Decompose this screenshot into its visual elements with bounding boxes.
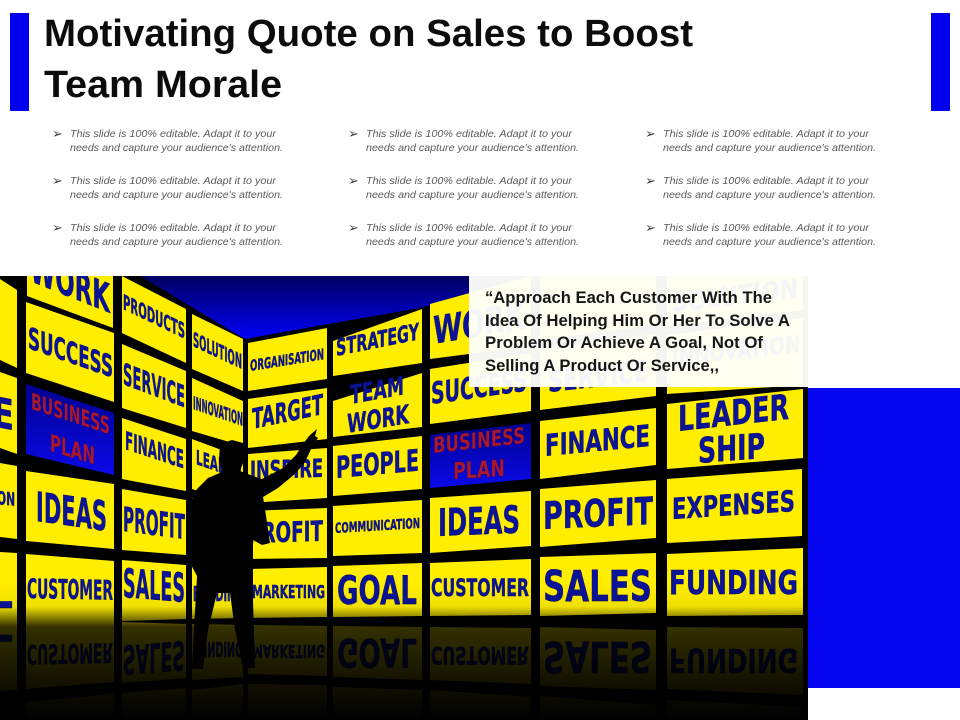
- quote box: Selling A Product Or Service,,: [485, 357, 719, 375]
- centre wall screens: WORK: [347, 400, 410, 440]
- bullet column 3: ➢: [645, 127, 656, 142]
- left wall screens: LEADER: [196, 446, 242, 485]
- bullet column 1: needs and capture your audience's attention.: [70, 189, 283, 201]
- photo: man pointing at wall of business word screens: [0, 243, 808, 720]
- bullet column 2: This slide is 100% editable. Adapt it to your: [366, 222, 573, 234]
- centre wall screens: TARGET: [252, 388, 323, 436]
- bullet column 2: This slide is 100% editable. Adapt it to your: [366, 128, 573, 140]
- right wall screens: SERVICE: [548, 354, 648, 400]
- floor reflection of screens: FUNDING: [193, 637, 243, 661]
- bullet column 3: needs and capture your audience's attention.: [663, 189, 876, 201]
- centre wall screens: COMMUNICATION: [335, 516, 420, 537]
- photo: man pointing at wall of business word screens: INNOVATION: [193, 393, 243, 431]
- bullet column 1: [52, 127, 283, 248]
- centre wall screens: MARKETING: [252, 582, 325, 603]
- floor reflection of screens: GOAL: [337, 629, 417, 674]
- floor reflection of screens: CUSTOMER: [27, 636, 113, 669]
- bullet column 1: ➢: [52, 221, 63, 236]
- photo: man pointing at wall of business word screens: SOLUTION: [193, 327, 242, 374]
- centre wall screens: WORK: [433, 293, 526, 354]
- man silhouette pointing: [188, 429, 318, 669]
- bullet column 1: This slide is 100% editable. Adapt it to your: [70, 175, 277, 187]
- bullet column 3: needs and capture your audience's attention.: [663, 142, 876, 154]
- right accent bar: [931, 13, 950, 111]
- centre wall screens: ORGANISATION: [250, 345, 324, 375]
- centre wall screens: PEOPLE: [336, 444, 419, 486]
- bullet column 1: ➢: [52, 127, 63, 142]
- left wall screens: PROFIT: [123, 500, 185, 548]
- bullet column 3: This slide is 100% editable. Adapt it to your: [663, 128, 870, 140]
- bullet column 3: needs and capture your audience's attention.: [663, 236, 876, 248]
- bullet column 1: needs and capture your audience's attention.: [70, 142, 283, 154]
- left wall screens: SALES: [123, 561, 185, 612]
- blue backing panel: [800, 388, 960, 688]
- blue ceiling: [140, 276, 469, 339]
- right wall screens: FUNDING: [669, 563, 798, 602]
- bullet column 1: This slide is 100% editable. Adapt it to your: [70, 128, 277, 140]
- centre wall screens: PLAN: [453, 456, 505, 485]
- left wall screens: IDEAS: [36, 483, 107, 541]
- left wall screens: FINANCE: [125, 427, 184, 475]
- centre wall screens: BUSINESS: [433, 424, 525, 459]
- bullet column 2: needs and capture your audience's attention.: [366, 142, 579, 154]
- bullet column 3: ➢: [645, 174, 656, 189]
- centre wall screens: STRATEGY: [336, 318, 420, 362]
- left wall screens: [0, 243, 243, 626]
- centre wall screens: GOAL: [337, 569, 417, 614]
- left wall screens: SUCCESS: [28, 321, 113, 386]
- bullet column 3: ➢: [645, 221, 656, 236]
- bullet column 3: This slide is 100% editable. Adapt it to your: [663, 175, 870, 187]
- right wall screens: PROFIT: [543, 489, 653, 538]
- bullet column 3: [645, 127, 876, 248]
- left wall screens: PRODUCTS: [123, 290, 185, 344]
- left wall screens: PLAN: [50, 429, 95, 470]
- right wall screens: INNOVATION: [672, 330, 800, 371]
- left wall screens: WORK: [30, 243, 111, 323]
- bullet column 2: This slide is 100% editable. Adapt it to your: [366, 175, 573, 187]
- bullet column 1: ➢: [52, 174, 63, 189]
- centre wall screens: [248, 276, 531, 618]
- floor reflection of screens: SALES: [123, 631, 185, 682]
- right wall screens: SHIP: [698, 426, 765, 472]
- right wall screens: EXPENSES: [672, 484, 795, 526]
- quote box: Problem Or Achieve A Goal, Not Of: [485, 334, 764, 352]
- bullet column 2: [348, 127, 579, 248]
- quote box: [469, 276, 809, 387]
- photo: man pointing at wall of business word screens: FUNDING: [193, 582, 243, 606]
- right wall screens: SALES: [543, 562, 652, 612]
- centre wall screens: INSPIRE: [250, 454, 323, 485]
- floor reflection of screens: CUSTOMER: [431, 641, 529, 669]
- title: Motivating Quote on Sales to Boost: [44, 13, 693, 55]
- left wall screens: BUSINESS: [31, 388, 110, 440]
- floor reflection of screens: [0, 622, 803, 702]
- bullet column 2: needs and capture your audience's attention.: [366, 189, 579, 201]
- right wall screens: FINANCE: [545, 419, 650, 464]
- right wall screens: LEADER: [678, 387, 789, 440]
- bullet column 1: This slide is 100% editable. Adapt it to your: [70, 222, 277, 234]
- floor reflection of screens: MARKETING: [252, 640, 325, 661]
- centre wall screens: SUCCESS: [431, 364, 527, 412]
- bullet column 3: This slide is 100% editable. Adapt it to your: [663, 222, 870, 234]
- floor reflection of screens: FUNDING: [669, 641, 798, 680]
- left wall screens: CUSTOMER: [27, 574, 113, 607]
- centre wall screens: IDEAS: [438, 498, 520, 545]
- right wall screens: [540, 274, 803, 616]
- bullet column 2: ➢: [348, 127, 359, 142]
- bullet column 2: ➢: [348, 221, 359, 236]
- centre wall screens: CUSTOMER: [431, 574, 529, 602]
- bullet column 2: needs and capture your audience's attention.: [366, 236, 579, 248]
- quote box: Idea Of Helping Him Or Her To Solve A: [485, 312, 790, 330]
- quote box: “Approach Each Customer With The: [485, 289, 772, 307]
- title: [44, 13, 693, 106]
- title: Team Morale: [44, 64, 282, 106]
- centre wall screens: TEAM: [350, 371, 404, 411]
- left wall screens: SERVICE: [123, 357, 185, 415]
- bullet column 2: ➢: [348, 174, 359, 189]
- bullet column 1: needs and capture your audience's attention.: [70, 236, 283, 248]
- right wall screens: SOLUTION: [672, 274, 798, 319]
- centre wall screens: PROFIT: [248, 515, 323, 550]
- floor reflection of screens: SALES: [543, 631, 652, 681]
- left accent bar: [10, 13, 29, 111]
